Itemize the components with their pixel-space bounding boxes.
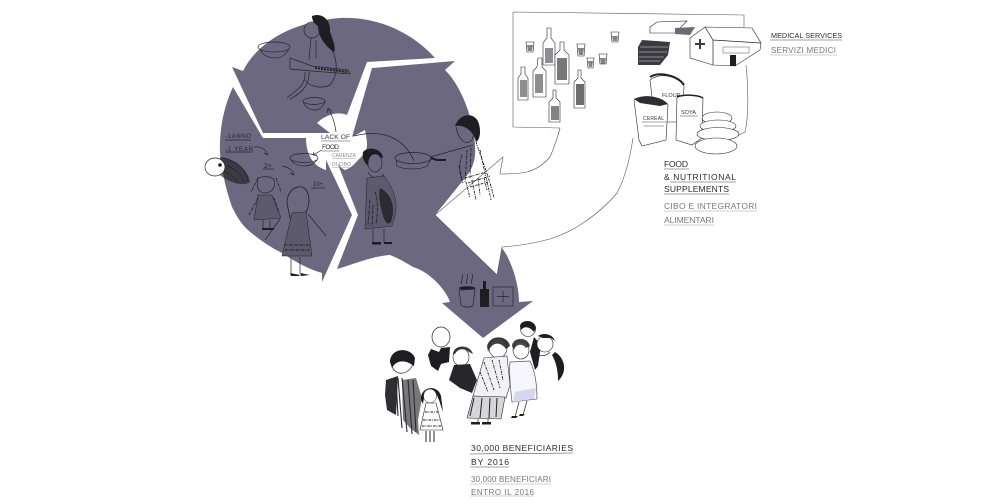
cycle diagram bbox=[220, 18, 533, 338]
figure: large woman with skirt bbox=[467, 337, 510, 424]
figure: little girl bbox=[420, 388, 443, 442]
text: food and nutritional supplements: CIBO E INTEGRATORI bbox=[664, 201, 757, 211]
icon: older girl bbox=[265, 187, 326, 276]
icon: grinding woman bbox=[287, 15, 350, 99]
icon: group of beneficiaries bbox=[385, 321, 564, 442]
icon: bowl centre top bbox=[303, 98, 325, 110]
arrow: white incoming arrow outline bbox=[435, 128, 633, 275]
icon: pregnant woman bbox=[363, 149, 396, 244]
icon: food sacks: FLOUR bbox=[662, 93, 681, 99]
segment: right wedge with arrow tail bbox=[337, 61, 533, 338]
text: medical services: SERVIZI MEDICI bbox=[771, 46, 836, 55]
arrow: to top bowl bbox=[327, 108, 336, 132]
segment: left wedge bbox=[220, 87, 352, 282]
figure: woman in dark dress bbox=[449, 346, 477, 393]
icon: bowl with ladle bbox=[395, 145, 473, 169]
text: age labels on left wedge: -1 YEAR bbox=[225, 147, 254, 153]
text: lack of food: LACK OF bbox=[321, 134, 350, 141]
icon: small girl bbox=[249, 177, 281, 230]
text: lack of food bbox=[321, 134, 357, 168]
box outline: supplies bbox=[513, 12, 744, 128]
text: beneficiaries: 30,000 BENEFICIARI bbox=[471, 475, 551, 484]
icon: food sacks: CEREAL bbox=[643, 116, 664, 122]
text: medical services bbox=[770, 31, 842, 55]
icon: clinic building bbox=[690, 27, 761, 66]
text: food and nutritional supplements: & NUTRITIONAL bbox=[664, 172, 736, 182]
text: age labels on left wedge bbox=[225, 134, 325, 188]
text: lack of food: DI CIBO bbox=[332, 162, 351, 168]
text: age labels on left wedge: -1ANNO bbox=[225, 134, 251, 140]
text: food and nutritional supplements: SUPPLEMENTS bbox=[664, 184, 729, 194]
text: lack of food: FOOD bbox=[322, 144, 339, 151]
icon: medicine boxes bbox=[638, 21, 695, 65]
icon: food sacks: SOYA bbox=[681, 110, 696, 116]
icon: food and medicine in arrow bbox=[459, 274, 513, 307]
connector: medical services line bbox=[735, 65, 748, 137]
text: age labels on left wedge: 2+ bbox=[264, 163, 272, 170]
figure: right head with dark hair bbox=[530, 334, 564, 381]
figure: woman with headscarf bbox=[385, 350, 422, 435]
icon: food sacks bbox=[634, 74, 739, 154]
icon: baby head bbox=[205, 157, 250, 184]
text: food and nutritional supplements bbox=[664, 159, 757, 225]
icon: woman with ladle bbox=[455, 115, 494, 200]
text: beneficiaries: 30,000 BENEFICIARIES bbox=[471, 443, 573, 453]
text: lack of food: CARENZA bbox=[332, 153, 357, 159]
text: food and nutritional supplements: FOOD bbox=[664, 159, 688, 169]
arrow: lack of food to right bowl bbox=[354, 134, 414, 161]
figure: man bbox=[428, 327, 450, 371]
text: medical services: MEDICAL SERVICES bbox=[771, 31, 842, 40]
text: food and nutritional supplements: ALIMENTARI bbox=[664, 215, 714, 225]
icon: bowl centre left with arrow bbox=[290, 150, 322, 166]
text: age labels on left wedge: 10+ bbox=[313, 182, 324, 188]
text: beneficiaries: BY 2016 bbox=[471, 457, 509, 467]
text: beneficiaries bbox=[470, 443, 573, 497]
figure: woman in white dress bbox=[510, 339, 537, 418]
text: beneficiaries: ENTRO IL 2016 bbox=[471, 488, 535, 497]
icon: bowl upper left bbox=[258, 42, 290, 58]
figure: back head bbox=[520, 321, 541, 370]
icon: bottles and cups bbox=[518, 28, 619, 122]
segment: top wedge bbox=[232, 18, 435, 133]
